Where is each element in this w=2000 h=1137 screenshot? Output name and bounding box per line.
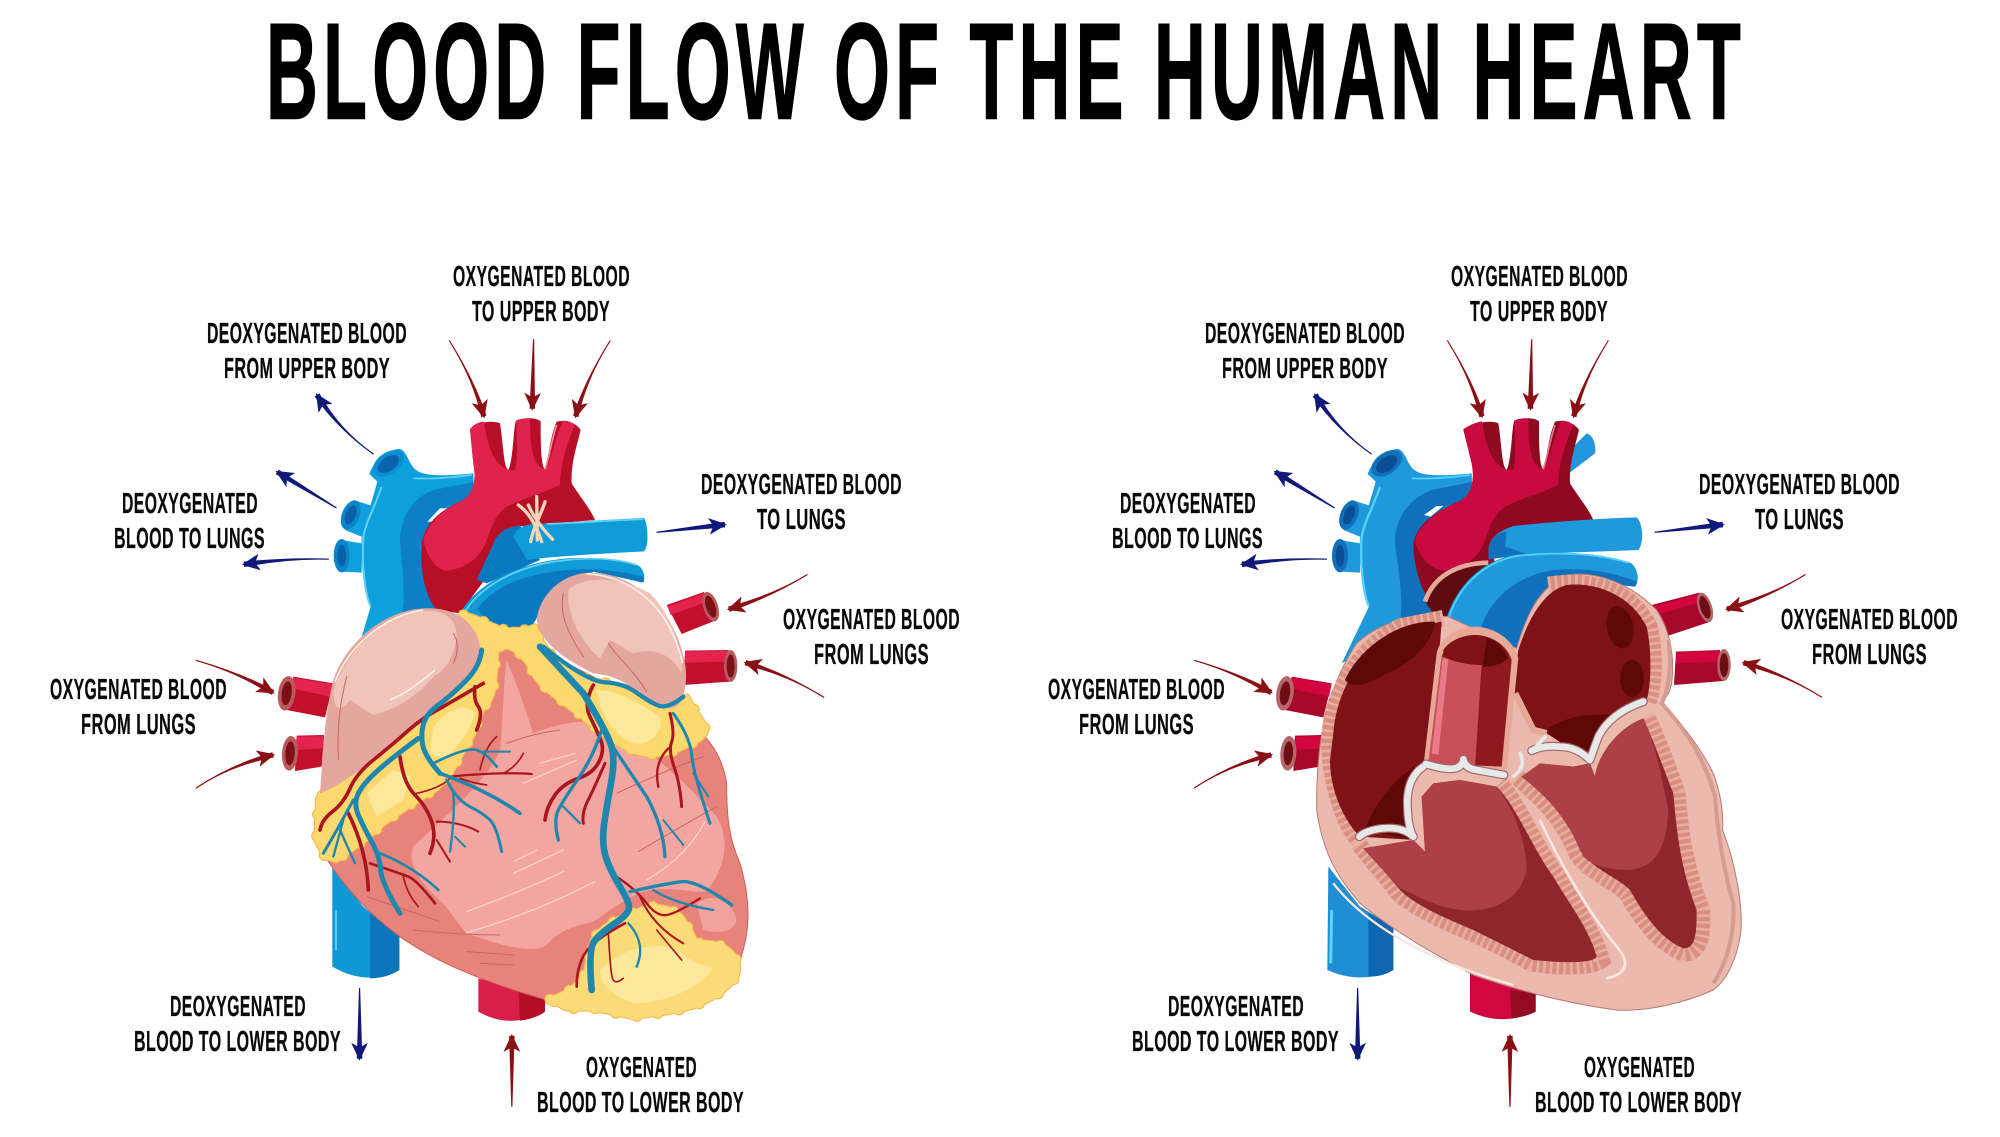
label: oxygenated blood from lungs right xyxy=(783,604,960,671)
arrow: to lungs upper xyxy=(1275,470,1335,508)
right heart: cross section xyxy=(1274,418,1741,1019)
label: deoxygenated blood to lungs right: DEOXYGENATED BLOOD xyxy=(701,469,902,501)
gap between vena cava and aorta xyxy=(427,508,449,522)
fat deposits upper xyxy=(317,615,705,860)
label: oxygenated blood to upper body: TO UPPER BODY xyxy=(472,296,610,328)
pulmonary artery xyxy=(1488,517,1642,559)
arrow: to upper body right xyxy=(574,340,610,417)
inferior vena cava xyxy=(1327,867,1393,977)
labels left heart xyxy=(50,261,960,1119)
red veins right side xyxy=(1652,591,1731,685)
arrow: to lungs lower xyxy=(1242,559,1327,566)
label: deoxygenated blood to lungs right xyxy=(1699,469,1900,536)
arrow: from lungs upper right xyxy=(1727,575,1806,611)
descending aorta stub xyxy=(1470,973,1536,1019)
label: oxygenated blood from lungs left: OXYGENATED BLOOD xyxy=(1048,674,1225,706)
arrow: to upper body centre xyxy=(1528,339,1533,408)
label: oxygenated blood to upper body: TO UPPER BODY xyxy=(1470,296,1608,328)
arrow: from lungs upper right xyxy=(729,575,807,611)
label: oxygenated blood to upper body: OXYGENATED BLOOD xyxy=(453,261,630,293)
label: oxygenated blood to lower body xyxy=(537,1052,744,1119)
label: deoxygenated blood from upper body xyxy=(207,318,407,385)
label: oxygenated blood to lower body: OXYGENATED xyxy=(586,1052,697,1084)
arrow: from lungs upper left xyxy=(1194,660,1272,694)
arrow: to lungs lower xyxy=(244,559,329,566)
coronary arteries xyxy=(320,683,700,987)
label: oxygenated blood from lungs left: OXYGENATED BLOOD xyxy=(50,674,227,706)
far pulmonary branch xyxy=(1567,433,1595,475)
arrow: oxygenated lower body xyxy=(510,1036,514,1107)
arrow: from lungs lower left xyxy=(1194,753,1271,788)
ventricle body xyxy=(320,643,748,1007)
label: deoxygenated blood to lower body xyxy=(134,991,341,1058)
label: oxygenated blood from lungs right: OXYGENATED BLOOD xyxy=(783,604,960,636)
label: deoxygenated blood from upper body: DEOXYGENATED BLOOD xyxy=(1205,318,1405,350)
label: oxygenated blood to upper body xyxy=(1451,261,1628,328)
aortic outflow tube xyxy=(1423,627,1518,772)
left heart: external view xyxy=(276,418,748,1021)
arrow: to lungs upper xyxy=(277,470,337,508)
arrow: to upper body right xyxy=(1572,340,1608,417)
label: oxygenated blood from lungs left xyxy=(1048,674,1225,741)
arrow: to lower body xyxy=(357,988,362,1058)
arrow: to upper body centre xyxy=(530,339,534,408)
label: deoxygenated blood to lower body xyxy=(1132,991,1339,1058)
right ventricle chamber xyxy=(1358,780,1602,966)
label: deoxygenated blood to lungs right: TO LUNGS xyxy=(757,504,846,536)
label: oxygenated blood to lower body: OXYGENATED xyxy=(1584,1052,1695,1084)
label: deoxygenated blood to lower body: DEOXYGENATED xyxy=(1168,991,1304,1023)
label: oxygenated blood from lungs left: FROM LUNGS xyxy=(1079,709,1194,741)
left atrium chamber xyxy=(1513,583,1653,762)
valves xyxy=(1359,702,1643,837)
label: deoxygenated blood from upper body: FROM UPPER BODY xyxy=(224,353,390,385)
arrow: from lungs upper left xyxy=(196,660,274,694)
labels right heart xyxy=(1048,261,1958,1119)
arrow: from upper body xyxy=(1314,394,1372,454)
label: oxygenated blood from lungs right xyxy=(1781,604,1958,671)
pulmonary trunk xyxy=(1443,553,1638,653)
fat deposit lower xyxy=(550,907,738,1017)
label: deoxygenated blood to lungs right: TO LUNGS xyxy=(1755,504,1844,536)
aorta xyxy=(421,418,595,613)
label: oxygenated blood to upper body: OXYGENATED BLOOD xyxy=(1451,261,1628,293)
right atrium chamber xyxy=(1329,618,1443,840)
aorta xyxy=(1413,418,1593,613)
arrow: to lower body xyxy=(1355,988,1360,1058)
inferior vena cava xyxy=(332,867,399,978)
label: deoxygenated blood to lungs left: DEOXYGENATED xyxy=(122,488,258,520)
label: oxygenated blood to lower body: BLOOD TO LOWER BODY xyxy=(537,1087,744,1119)
label: deoxygenated blood to lungs right xyxy=(701,469,902,536)
heart wall xyxy=(1317,574,1741,1010)
septum highlight xyxy=(1540,820,1625,978)
pulmonary trunk xyxy=(459,558,644,630)
left atrial appendage xyxy=(537,573,686,708)
ligament xyxy=(518,497,553,542)
label: deoxygenated blood to lower body: DEOXYGENATED xyxy=(170,991,306,1023)
label: deoxygenated blood to lower body: BLOOD TO LOWER BODY xyxy=(134,1026,341,1058)
label: deoxygenated blood from upper body: DEOXYGENATED BLOOD xyxy=(207,318,407,350)
left ventricle chamber xyxy=(1517,717,1702,953)
superior vena cava and right atrium xyxy=(1332,445,1473,663)
pulmonary artery xyxy=(477,518,648,583)
label: oxygenated blood to upper body xyxy=(453,261,630,328)
coronary veins xyxy=(323,647,732,990)
descending aorta stub xyxy=(478,978,545,1021)
arrow: to upper body left xyxy=(449,340,486,417)
label: deoxygenated blood from upper body: FROM UPPER BODY xyxy=(1222,353,1388,385)
label: oxygenated blood to lower body: BLOOD TO LOWER BODY xyxy=(1535,1087,1742,1119)
right atrial appendage xyxy=(320,608,480,793)
mitral septum strand xyxy=(1515,693,1547,733)
arrow: from lungs lower right xyxy=(745,661,824,697)
superior vena cava and right atrium xyxy=(334,445,475,645)
red veins right side xyxy=(667,590,737,685)
label: deoxygenated blood to lungs left: DEOXYGENATED xyxy=(1120,488,1256,520)
arrow: to upper body left xyxy=(1447,340,1484,417)
red veins left side xyxy=(276,675,333,771)
label: deoxygenated blood to lungs left xyxy=(114,488,265,555)
label: oxygenated blood from lungs left xyxy=(50,674,227,741)
arrow: to lungs right xyxy=(1655,522,1723,532)
label: deoxygenated blood to lungs left: BLOOD TO LUNGS xyxy=(114,523,265,555)
arrow: from lungs lower right xyxy=(1743,661,1822,697)
arrows left heart xyxy=(196,339,824,1107)
label: deoxygenated blood to lungs left xyxy=(1112,488,1263,555)
arrow: from upper body xyxy=(315,394,374,454)
label: oxygenated blood from lungs left: FROM LUNGS xyxy=(81,709,196,741)
arrows right heart xyxy=(1194,339,1822,1107)
gap between vena cava and aorta xyxy=(1424,506,1443,517)
label: deoxygenated blood from upper body xyxy=(1205,318,1405,385)
aortic root chamber xyxy=(1425,563,1490,620)
label: deoxygenated blood to lungs left: BLOOD TO LUNGS xyxy=(1112,523,1263,555)
label: deoxygenated blood to lower body: BLOOD TO LOWER BODY xyxy=(1132,1026,1339,1058)
arrow: oxygenated lower body xyxy=(1508,1036,1512,1107)
label: oxygenated blood from lungs right: FROM LUNGS xyxy=(814,639,929,671)
red veins left side xyxy=(1274,675,1332,771)
label: oxygenated blood to lower body xyxy=(1535,1052,1742,1119)
arrow: to lungs right xyxy=(656,522,725,532)
arrow: from lungs lower left xyxy=(196,753,273,788)
